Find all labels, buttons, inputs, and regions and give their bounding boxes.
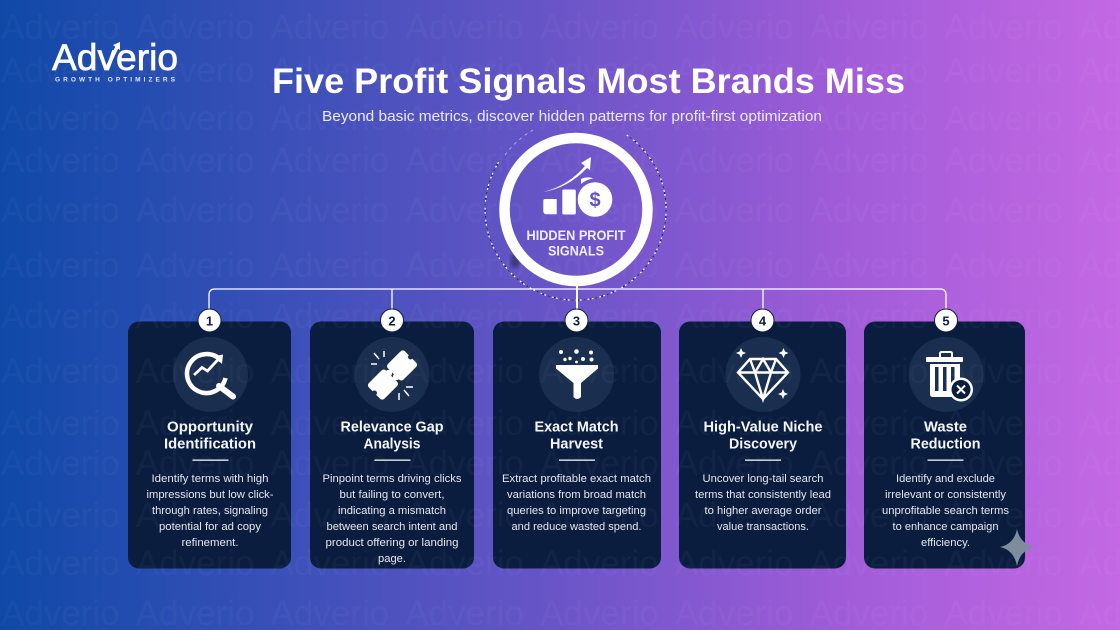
card 5 heading: Waste — [924, 420, 967, 436]
icon: trash can with x — [908, 337, 984, 412]
number 4: 4 — [759, 313, 767, 328]
card 2 body: indicating a mismatch — [338, 505, 446, 517]
number 2 — [380, 309, 404, 332]
card 4 body: value transactions. — [717, 521, 809, 533]
connector tree — [209, 286, 946, 310]
card 3 heading: Harvest — [550, 436, 603, 452]
icon: funnel — [539, 337, 614, 412]
card 2 body: page. — [378, 553, 406, 565]
card 1 body: impressions but low click- — [146, 489, 274, 501]
number 3: 3 — [573, 313, 580, 328]
card 2 body: but failing to convert, — [340, 489, 444, 501]
card 1 body: refinement. — [182, 537, 238, 549]
card 3 heading: Exact Match — [534, 420, 618, 436]
subtitle: Beyond basic metrics, discover hidden patterns for profit-first optimization — [322, 109, 822, 125]
number 1: 1 — [206, 313, 213, 328]
card 5: waste reduction — [864, 309, 1025, 568]
card 3 body: queries to improve targeting — [507, 505, 646, 517]
card 2 body: Pinpoint terms driving clicks — [322, 473, 462, 485]
badge label: HIDDEN PROFIT — [526, 228, 626, 243]
card 5 heading — [910, 420, 980, 461]
card 5 heading: Reduction — [910, 436, 980, 452]
card 5 body — [882, 473, 1010, 549]
card 3 body: and reduce wasted spend. — [512, 521, 642, 533]
card 5 body: unprofitable search terms — [882, 505, 1010, 517]
card 3: exact match harvest — [493, 309, 661, 568]
badge label — [526, 228, 626, 258]
card 3 body — [502, 473, 651, 533]
card 4 body: terms that consistently lead — [695, 489, 831, 501]
card 1: opportunity identification — [128, 309, 291, 568]
card 1 heading: Identification — [164, 436, 256, 452]
number 5: 5 — [942, 313, 950, 328]
card 4 body — [695, 473, 831, 533]
card 4 heading — [704, 420, 822, 461]
number 4 — [751, 309, 774, 332]
icon: growth bars and dollar coin — [543, 157, 612, 217]
logo: Adverio: GROWTH OPTIMIZERS — [55, 76, 176, 84]
card 2 heading — [340, 420, 444, 461]
card 3 body: Extract profitable exact match — [502, 473, 651, 485]
card 5 body: to enhance campaign — [892, 521, 998, 533]
card 5 body: efficiency. — [921, 537, 970, 549]
card 4 heading: High-Value Niche — [704, 420, 822, 436]
card 1 body: through rates, signaling — [152, 505, 268, 517]
badge label: SIGNALS — [548, 244, 604, 258]
card 3 body: variations from broad match — [507, 489, 646, 501]
card 2: relevance gap analysis — [310, 309, 474, 568]
card 4 body: to higher average order — [704, 505, 822, 517]
card 1 heading — [164, 420, 256, 461]
number 3 — [565, 309, 588, 332]
card 2 heading: Relevance Gap — [340, 420, 444, 436]
title: Five Profit Signals Most Brands Miss — [272, 62, 905, 101]
card 2 body: product offering or landing — [326, 537, 458, 549]
card 1 heading: Opportunity — [167, 420, 253, 436]
logo: Adverio: Adverio — [52, 37, 178, 78]
card 4: high-value niche discovery — [679, 309, 846, 568]
card 1 body: potential for ad copy — [159, 521, 262, 533]
card 5 body: Identify and exclude — [896, 473, 995, 485]
card 3 heading — [534, 420, 618, 461]
card 2 heading: Analysis — [364, 436, 420, 452]
number 1 — [198, 309, 221, 332]
sparkle mark — [1000, 529, 1035, 566]
icon: magnifier with trend — [173, 337, 248, 412]
card 4 body: Uncover long-tail search — [702, 473, 824, 485]
icon: diamond with sparkles — [726, 337, 800, 412]
number 5 — [934, 309, 958, 332]
card 1 body: Identify terms with high — [152, 473, 268, 485]
card 2 body: between search intent and — [326, 521, 458, 533]
central badge: hidden profit signals — [485, 130, 666, 300]
card 5 body: irrelevant or consistently — [885, 489, 1007, 501]
card 2 body — [322, 473, 462, 565]
number 2: 2 — [388, 313, 396, 328]
icon: growth bars and dollar coin: $ — [589, 190, 601, 212]
card 1 body — [146, 473, 274, 549]
icon: broken chain — [354, 337, 430, 412]
card 4 heading: Discovery — [729, 436, 797, 452]
